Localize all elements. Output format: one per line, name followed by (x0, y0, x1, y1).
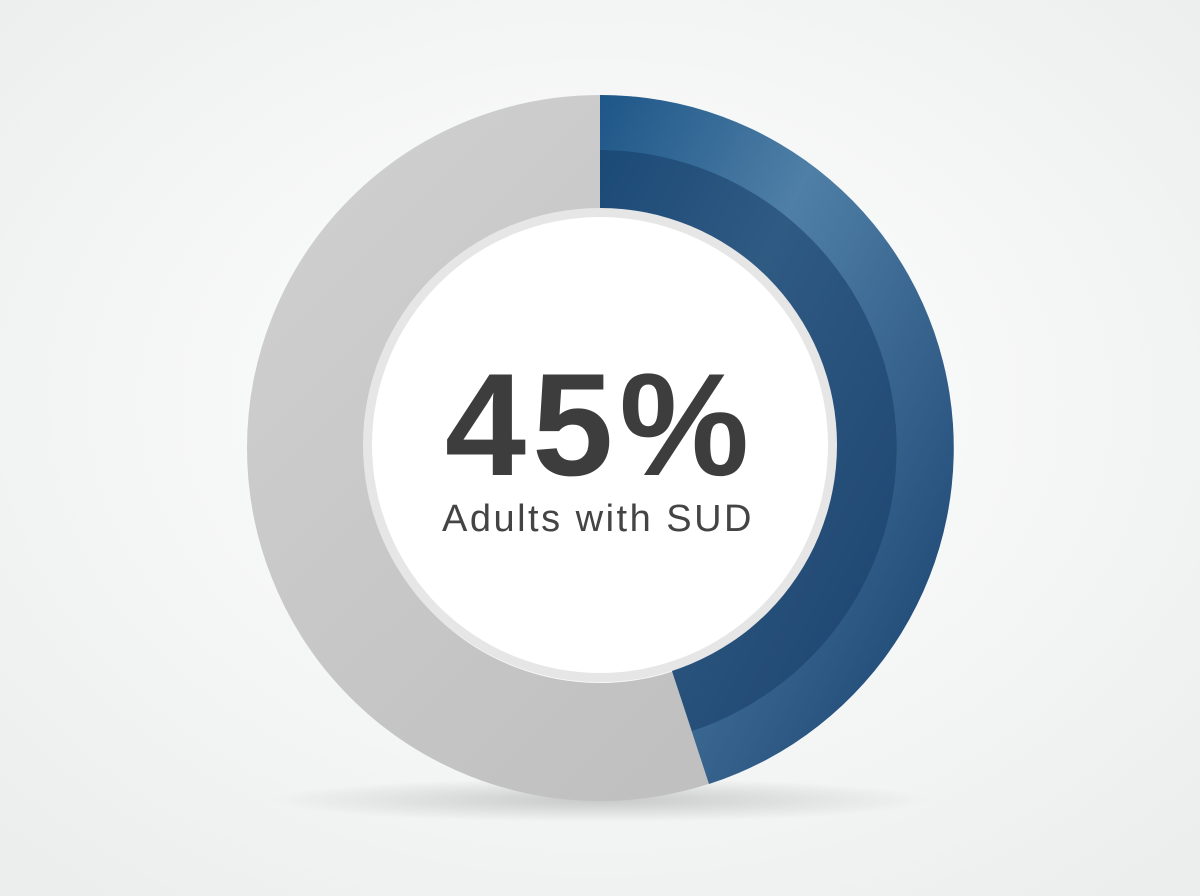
floor shadow (270, 778, 930, 822)
inner dark band (600, 150, 897, 731)
percentage value: 45% (445, 343, 755, 506)
label: Adults with SUD (442, 498, 754, 540)
ring: blue 45% segment (600, 95, 954, 784)
inner hole (363, 208, 837, 682)
ring: grey remainder (306, 154, 894, 742)
